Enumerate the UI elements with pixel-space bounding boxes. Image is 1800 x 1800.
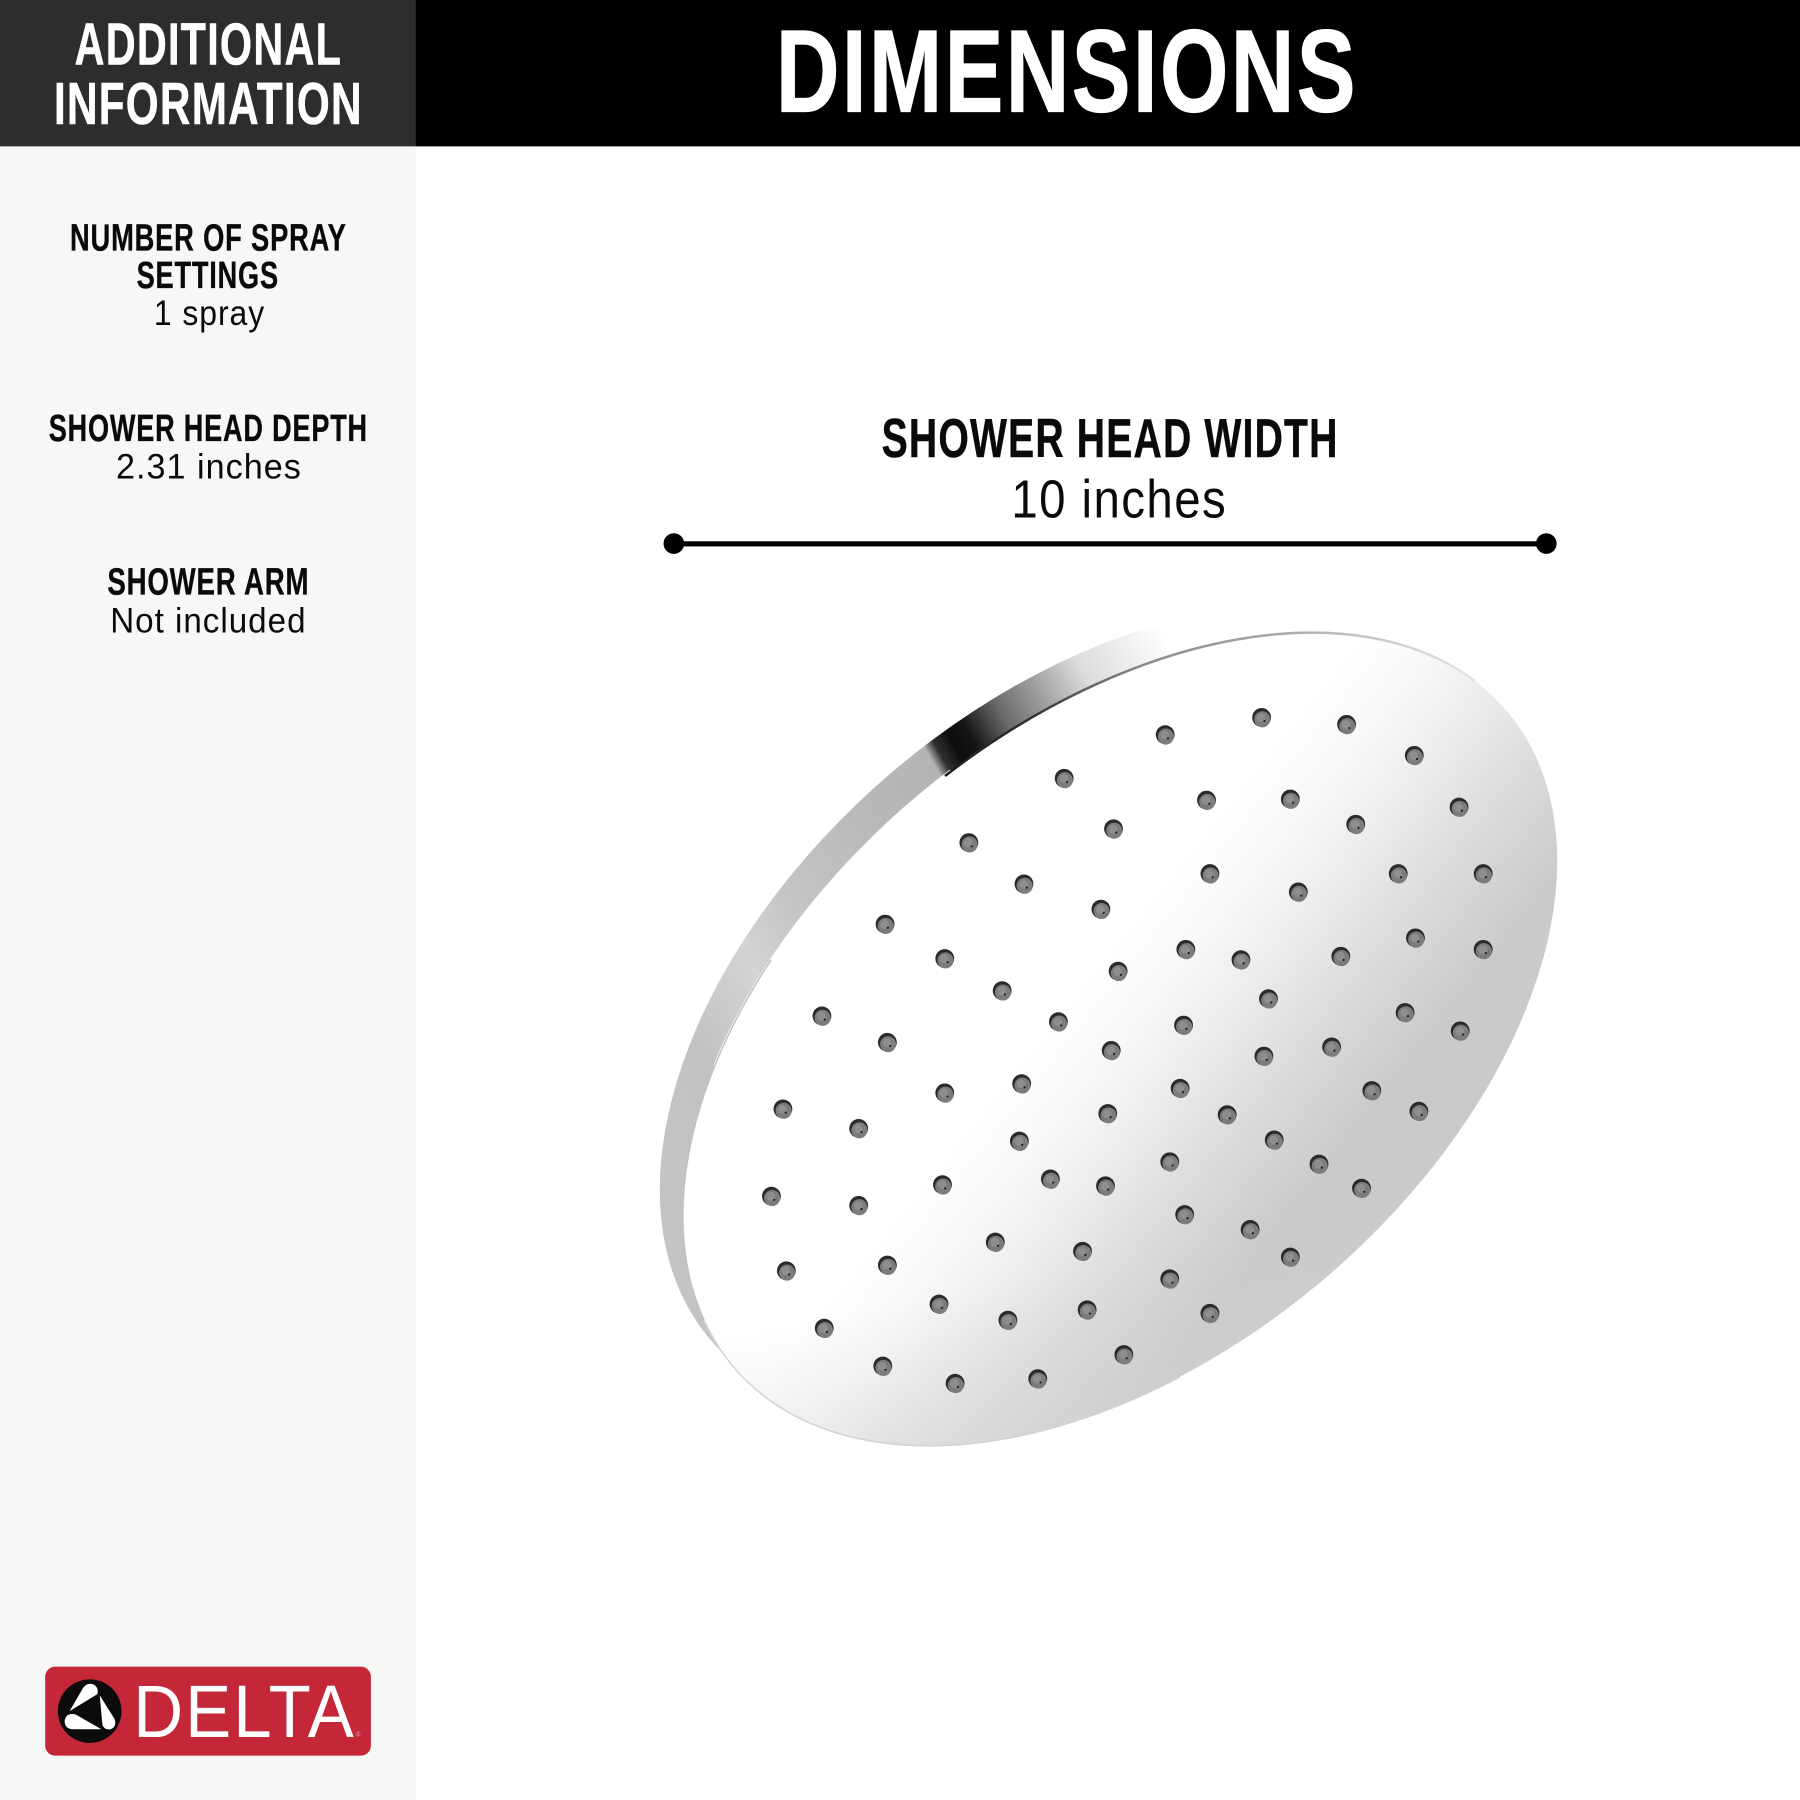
spec: shower head depth: 2.31 inches bbox=[116, 447, 302, 487]
shower head face bbox=[683, 632, 1557, 1446]
header: dimensions title: DIMENSIONS bbox=[776, 5, 1358, 136]
spec: shower arm: Not included bbox=[110, 601, 307, 641]
logo: Delta: DELTA bbox=[133, 1670, 356, 1753]
logo: Delta bbox=[45, 1667, 371, 1756]
spec: shower head depth bbox=[49, 408, 368, 487]
spec: shower arm bbox=[107, 562, 309, 641]
dimension arrow: width line bbox=[664, 533, 1557, 554]
header: additional information: ADDITIONAL bbox=[75, 10, 342, 77]
shower head body bbox=[660, 605, 1557, 1446]
panel: additional information sidebar bbox=[0, 146, 416, 1800]
header: dimensions title bbox=[416, 0, 1800, 146]
dimension label: shower head width: SHOWER HEAD WIDTH bbox=[882, 407, 1339, 469]
spec: shower head depth: SHOWER HEAD DEPTH bbox=[49, 408, 368, 450]
header: additional information: INFORMATION bbox=[54, 70, 363, 137]
spec: number of spray settings: NUMBER OF SPRAY bbox=[70, 217, 347, 259]
header: additional information bbox=[0, 0, 416, 146]
shower head rim bbox=[660, 605, 1534, 1418]
shower head illustration bbox=[660, 605, 1557, 1446]
spec: shower arm: SHOWER ARM bbox=[107, 562, 309, 604]
logo: Delta: ® bbox=[355, 1730, 361, 1738]
spec: number of spray settings bbox=[70, 217, 347, 333]
spray nozzles bbox=[762, 708, 1493, 1393]
spec: number of spray settings: 1 spray bbox=[154, 293, 265, 333]
spec: number of spray settings: SETTINGS bbox=[137, 255, 279, 297]
dimension label: shower head width: 10 inches bbox=[1011, 470, 1227, 530]
dimension label: shower head width bbox=[882, 407, 1339, 530]
